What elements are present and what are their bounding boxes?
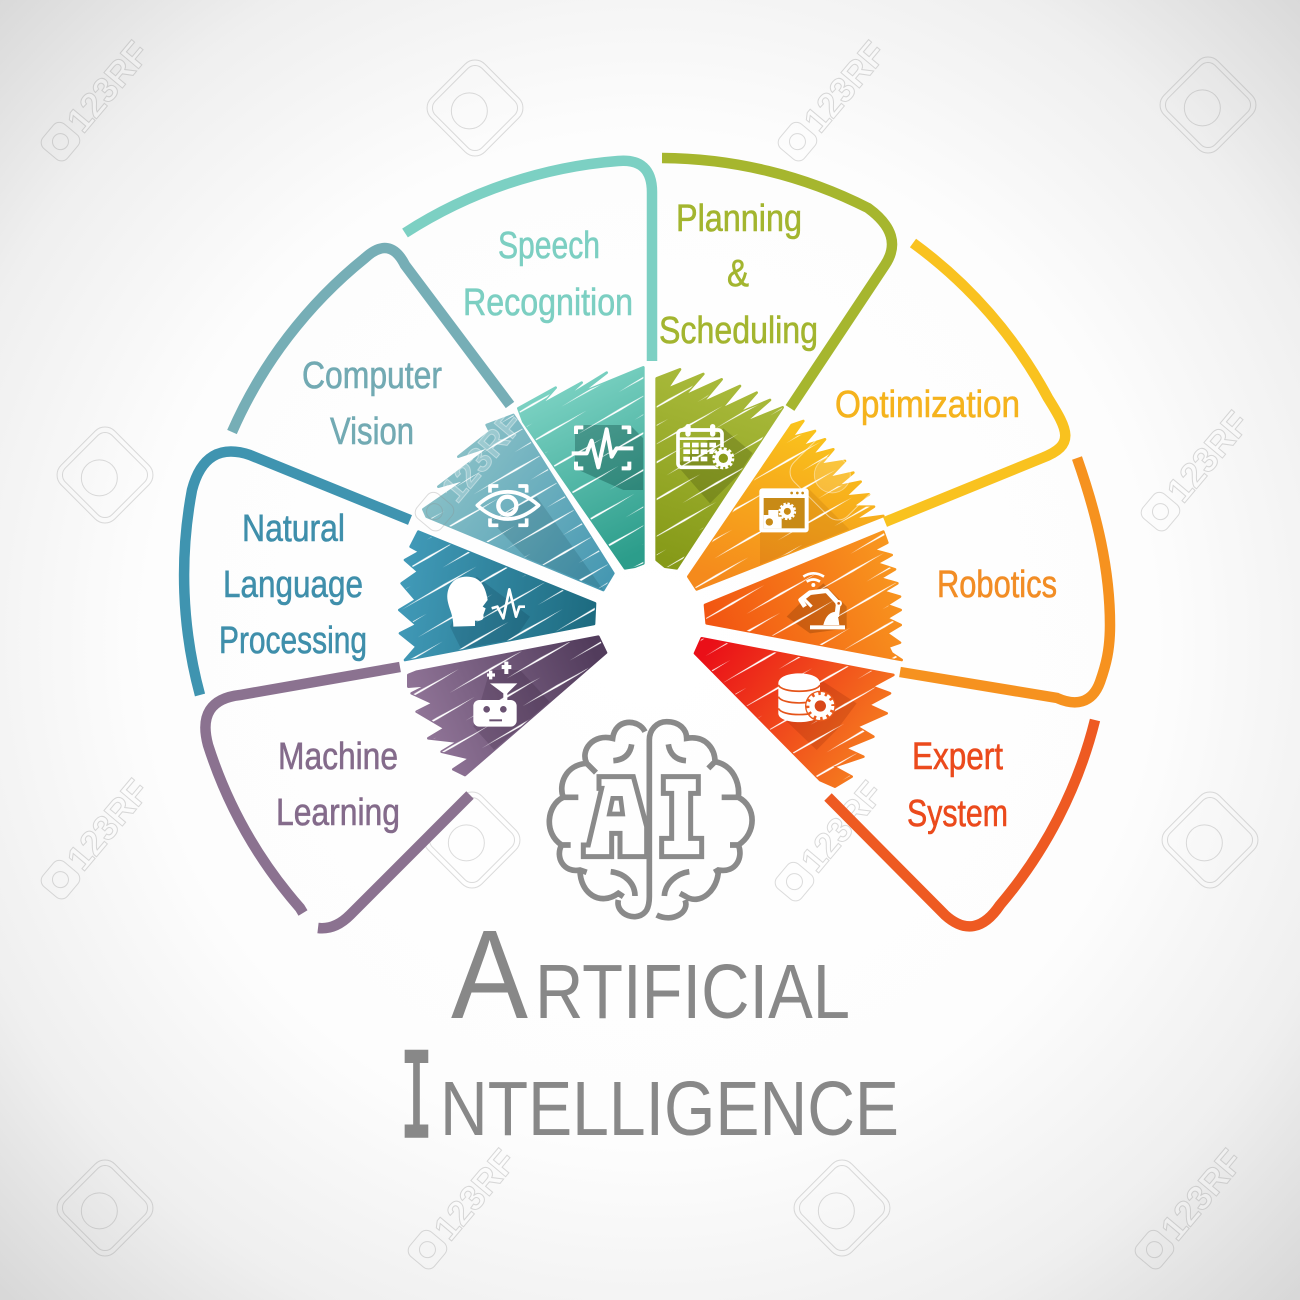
label: planning and scheduling: & [727,253,749,295]
title line: Intelligence: I [400,1030,433,1175]
label: machine learning: Machine [278,736,398,778]
label: machine learning [276,736,400,834]
watermarks: 123RF [427,1142,524,1248]
wheel labels [219,198,1057,835]
title line: Intelligence: NTELLIGENCE [440,1066,899,1152]
icon: robot arm with wifi [801,573,845,629]
watermarks: 123RF [1154,1142,1251,1248]
frame: natural language processing [184,452,410,695]
label: planning and scheduling: Scheduling [659,310,818,352]
label: computer vision: Vision [330,411,414,453]
watermarks over the wheel [410,404,892,537]
label: computer vision: Computer [302,355,442,397]
label: natural language processing [219,508,367,662]
wedge: optimization [688,421,883,589]
wedge: computer vision [423,415,613,590]
title [400,904,899,1175]
frame: expert system [828,720,1095,926]
watermarks: 123RF [1160,404,1257,510]
wedge: natural language processing [399,532,595,660]
frame: optimization [885,243,1065,522]
watermarks: 123RF [797,34,894,140]
title line: Intelligence [400,1030,899,1175]
scribbled inner wheel [399,367,902,787]
label: speech recognition [463,225,633,324]
label: expert system: Expert [912,736,1003,778]
label: planning and scheduling: Planning [676,198,802,240]
label: optimization: Optimization [835,384,1020,426]
watermarks: 123RF [794,774,891,880]
wedge: planning and scheduling [657,369,783,568]
watermarks over the wheel: 123RF [434,404,531,510]
frame: planning and scheduling [662,158,892,408]
label: expert system: System [907,793,1008,835]
label: machine learning: Learning [276,792,400,834]
label: natural language processing: Processing [219,620,367,662]
icon: speaking head [447,577,525,627]
watermarks: 123RF [60,34,157,140]
frame: speech recognition [405,161,652,361]
label: robotics: Robotics [937,564,1057,606]
outer frames of the wheel [184,158,1110,928]
label: expert system [907,736,1008,835]
label: speech recognition: Speech [498,225,600,267]
title line: Artificial: A [451,904,528,1045]
icon: database with gear [778,673,836,722]
frame: machine learning [205,667,470,928]
icon: gear window [759,488,809,532]
wedge: machine learning [408,637,606,775]
label: planning and scheduling [659,198,818,352]
icon: robot with sparkles [473,662,517,727]
icon: calendar with gear [678,424,735,470]
wedge: robotics [705,532,902,660]
wedge: speech recognition [518,367,643,568]
label: speech recognition: Recognition [463,282,633,324]
frame: computer vision [232,248,510,432]
frame: robotics [900,458,1110,702]
title line: Artificial [451,904,850,1045]
icon: waveform scan [572,427,633,468]
wedge: expert system [695,638,893,787]
watermarks: 123RF [60,772,157,878]
icon: AI brain [549,722,752,918]
label: natural language processing: Natural [242,508,345,550]
label: computer vision [302,355,442,453]
label: natural language processing: Language [223,564,363,606]
title line: Artificial: RTIFICIAL [535,949,850,1035]
icon: eye [477,486,539,525]
